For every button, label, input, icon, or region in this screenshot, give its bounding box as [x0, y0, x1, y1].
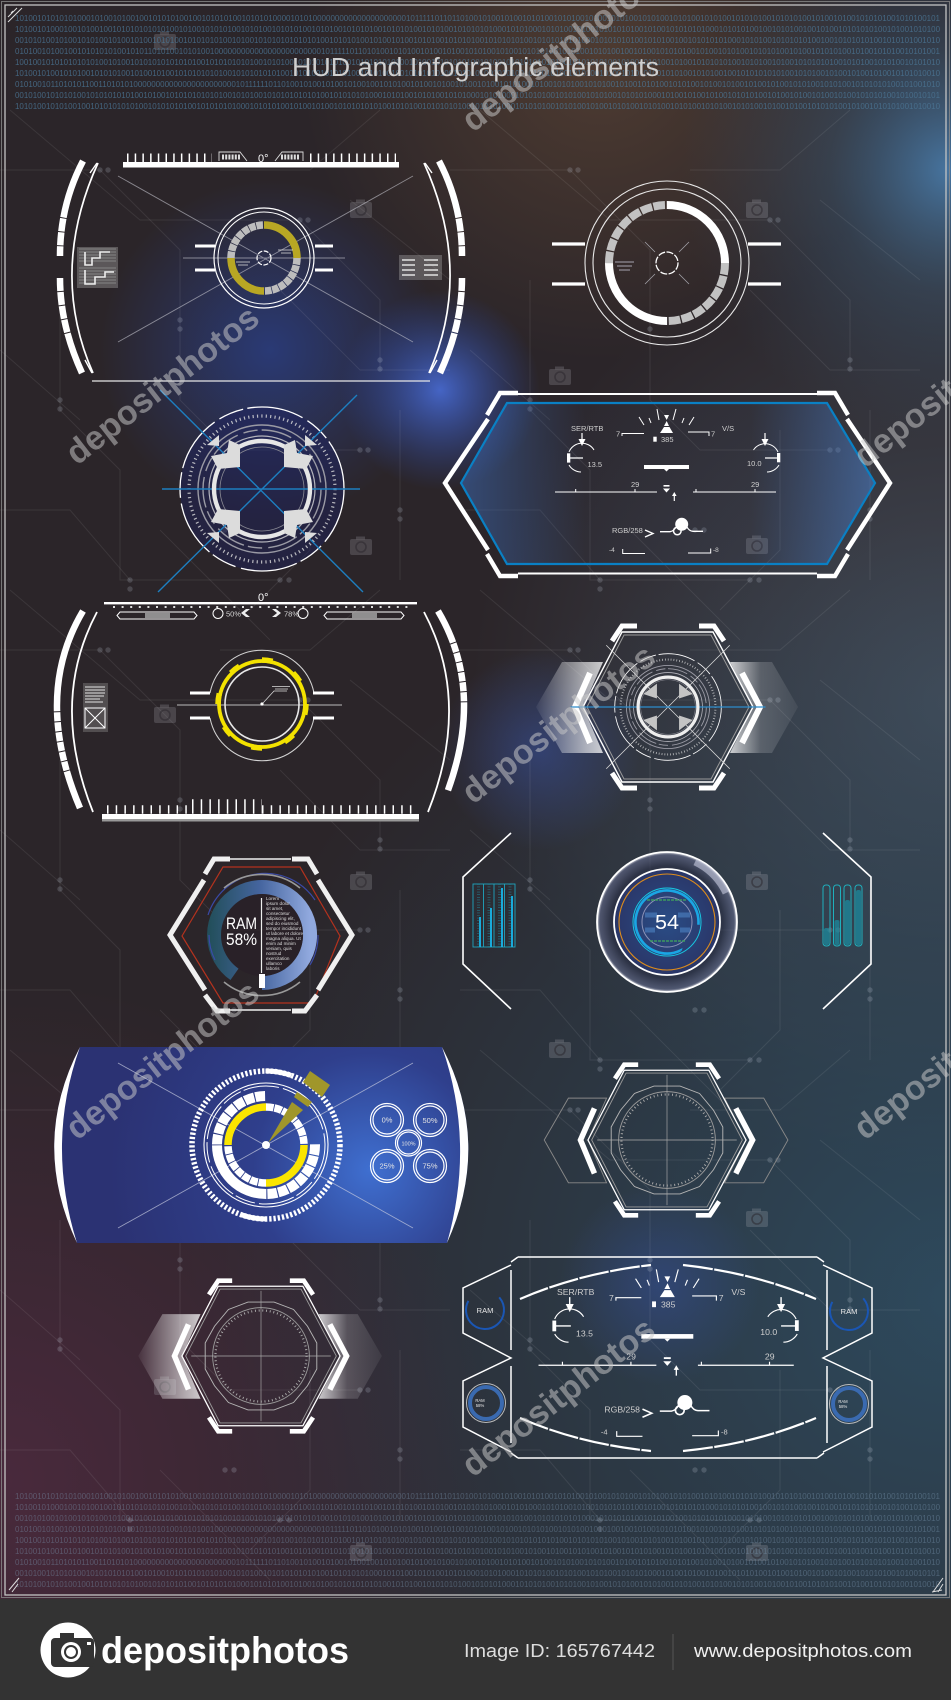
lorem text: sed do eiusmod — [266, 921, 299, 926]
curved rails — [520, 1265, 816, 1451]
panel: blue crosshair circle — [158, 390, 363, 592]
corner arrows — [207, 435, 317, 543]
binary text: bottom block: 00101010010100101010010100101001010100101010101001010010101010101010100101010100101001010010101001010101001010101010010101010101000101010101001010100100101010101000101010010101010100100101010101001010101001010 — [15, 1514, 941, 1523]
instrument cluster: 29 — [751, 480, 759, 489]
frame — [463, 1257, 872, 1458]
instrument cluster: 385 — [661, 435, 674, 444]
baseline — [92, 380, 430, 382]
binary text: bottom block: 10100101001010100101010100101001010010101010101001010101010100101010010101010010101001001010101010010101010010101001010010100101010010100101010100101010010101001001010101010100101010010100101001010010101010010 — [15, 1547, 941, 1556]
instrument cluster: V/S — [722, 424, 734, 433]
binary text: top block: 10010010101010101010010100101010101010101001010101010100101010010101010101001010101010100101001010101010010100101010101010100101010101001010010101001010010101010100101010010100101010101001010100101010010101010 — [15, 58, 941, 67]
binary text: top block: 01010010110101011001101010100000000000000000000000101111110110100101001010010100100101010010100101001010010100101010010100101010010101001010010101001010100101001010010100101001010100101010010101010100101001010 — [15, 80, 941, 89]
zero heading: 0° — [258, 592, 269, 604]
binary text: top block: 10100101001010100101010100101001010010101010101001010101010100101010010101010010101001001010101010010101010010101001010010100101010010100101010100101010010101001001010101010100101010010100101001010010101010010 — [15, 69, 941, 78]
blue crosshair lines — [158, 390, 363, 592]
lorem text — [266, 896, 303, 971]
instrument cluster: 7 — [711, 430, 715, 438]
binary text: top block: 10101001010100100101010101010010101010100101010101000101010100101001010010101010101001010100101010101001010101000101010100101010010100101010010101001010100101010010101001010010100101010100101001010101001010010 — [15, 102, 941, 111]
title: HUD and Infographic elements — [292, 54, 659, 82]
side labels: 58% — [839, 1404, 847, 1409]
instrument cluster: 29 — [626, 1351, 636, 1361]
readouts: 78% — [284, 610, 299, 618]
binary text: bottom block: 10010010101010101010010100101010101010101001010101010100101010010101010101001010101010100101001010101010010100101010101010100101010101001010010101001010010101010100101010010100101010101001010100101010010101010 — [15, 1536, 941, 1545]
instrument cluster: -8 — [721, 1428, 728, 1437]
percent buttons: 25% — [379, 1162, 395, 1170]
instrument cluster: 29 — [765, 1351, 775, 1361]
percent buttons: 75% — [422, 1162, 438, 1170]
binary text: bottom block: 01010010100100101010101001010110101001010100100000000000000000000000010111110110101001010100101001010010101001010010101010010101001010100100101001010101001010010101001010101001010010101010010100101010010101001 — [15, 1525, 941, 1534]
crescents — [54, 1047, 468, 1243]
readouts: 50% — [226, 610, 241, 618]
RAM label — [226, 915, 257, 949]
watermarks: depositphotos — [455, 1310, 662, 1484]
RAM label: RAM — [226, 915, 257, 933]
binary text: top block: 10100101000100101001001010101010101001010010101010010101001010101001010100101010100101010100101010010101010100010101000101010010100101010101001010010101010100010101010010010101001001010010101010100101001010100 — [15, 25, 941, 34]
lorem text: exercitation — [266, 956, 290, 961]
binary text: bottom block — [15, 1492, 941, 1589]
panel: cockpit display — [458, 1257, 876, 1458]
binary text: bottom block: 10101001010100100101010101010010101010100101010101000101010100101001010010101010101001010100101010101001010101000101010100101010010100101010010101001010100101010010101001010010100101010100101001010101001010010 — [15, 1580, 941, 1589]
binary text: bottom block: 10100101010101000101001010010010101010010010101010010101010000101010000000000000000000001011111011011010010100101001010100101010010100101010010101001010100101010010101010010101010010100101001010101001010100101 — [15, 1492, 941, 1501]
side labels: RAM — [838, 1399, 848, 1404]
lorem text: ut labore et dolore — [266, 931, 303, 936]
bottom scale — [102, 806, 419, 822]
instrument cluster: -4 — [601, 1428, 608, 1437]
binary text: top block: 00101010010100101010010100101001010100101010101001010010101010101010100101010100101001010010101001010101001010101010010101010101000101010101001010100100101010101000101010010101010100100101010101001010101001010 — [15, 36, 941, 45]
side labels — [475, 1306, 857, 1409]
instrument cluster — [539, 1269, 799, 1437]
watermarks: depositphotos — [59, 973, 266, 1147]
crosshair lines — [118, 176, 413, 342]
instrument cluster: 385 — [661, 1300, 676, 1310]
instrument cluster: 13.5 — [576, 1328, 593, 1338]
lorem text: sit amet, — [266, 906, 283, 911]
lorem text: laboris — [266, 966, 280, 971]
data box — [83, 683, 108, 732]
instrument cluster: -8 — [713, 547, 719, 554]
instrument cluster: 7 — [719, 1293, 724, 1303]
instrument cluster — [555, 409, 780, 554]
panel: winged hexagon — [138, 1281, 382, 1431]
watermarks: depositphotos — [455, 637, 662, 811]
main dial — [192, 1071, 340, 1219]
lorem text: ullamco — [266, 961, 282, 966]
icons: faint camera marks — [154, 32, 768, 1561]
radial gauge yellow — [195, 208, 333, 308]
panel: bubble speed gauge: 54 — [655, 912, 679, 934]
lorem text: consectetur — [266, 911, 290, 916]
panel: blue hexagon flight instruments — [445, 393, 890, 576]
instrument cluster: -4 — [609, 547, 615, 554]
donut RAM — [208, 873, 318, 996]
instrument cluster: SER/RTB — [557, 1287, 595, 1297]
top rail — [104, 602, 417, 619]
side labels: RAM — [475, 1398, 485, 1403]
yellow ring gauge — [177, 650, 342, 761]
data box right — [399, 255, 442, 280]
website: www.depositphotos.com — [693, 1640, 912, 1661]
panel: outline hexagon — [544, 1065, 788, 1215]
binary text: bottom block: 01010010110101011001101010100000000000000000000000101111110110100101001010010100100101010010100101001010010100101010010100101010010101001010010101001010100101001010010100101001010100101010010101010100101001010 — [15, 1558, 941, 1567]
panel: blue console gauge — [54, 1047, 468, 1243]
panel: RAM hexagon — [170, 859, 352, 1011]
lorem text: veniam, quis — [266, 946, 292, 951]
percent buttons: 100% — [401, 1142, 416, 1148]
panel: hexagon radar with wings — [536, 626, 798, 788]
instrument cluster: 10.0 — [747, 459, 762, 468]
binary text: top block: 00101001010101001010101010100101001010101010101001010100101010101010100101010101000101010010101001010100010101000101010100101010010101001010101000101001010010100101010100101001010010100101001010101001010010101 — [15, 91, 941, 100]
panel: ring gauge top-right — [552, 181, 781, 345]
heading zero degrees: 0° — [258, 153, 269, 165]
readouts — [213, 608, 308, 618]
footer bar — [0, 1599, 951, 1700]
bubble dial — [597, 852, 737, 992]
instrument cluster: SER/RTB — [571, 424, 603, 433]
instrument cluster: V/S — [731, 1287, 746, 1297]
icon: camera logo — [40, 1622, 96, 1678]
RAM label: 58% — [226, 931, 257, 949]
left arcs — [60, 161, 98, 373]
instrument cluster: 7 — [609, 1293, 614, 1303]
side labels: RAM — [841, 1307, 857, 1316]
instrument cluster: 29 — [631, 480, 639, 489]
side arcs — [57, 611, 97, 812]
binary text: top block — [15, 14, 941, 111]
panel: HUD frame with yellow ring — [57, 592, 464, 822]
instrument cluster: 13.5 — [588, 460, 602, 469]
percent buttons — [370, 1104, 446, 1182]
panel: bubble speed gauge — [463, 833, 871, 1009]
side labels: 58% — [476, 1403, 484, 1408]
percent buttons: 0% — [382, 1116, 393, 1124]
top scale bar — [123, 158, 399, 168]
left bars — [473, 884, 515, 947]
instrument cluster: RGB/258 — [604, 1405, 640, 1415]
panel: HUD targeting frame top-left — [60, 152, 462, 381]
lorem text: tempor incididunt — [266, 926, 302, 931]
lorem text: enim ad minim — [266, 941, 296, 946]
logo wordmark: depositphotos — [101, 1630, 349, 1671]
right arcs — [424, 161, 462, 373]
image id: Image ID: 165767442 — [464, 1640, 655, 1661]
lorem text: ipsum dolor — [266, 901, 290, 906]
binary text: top block: 01010010100100101010101001010110101001010100100000000000000000000000010111110110101001010100101001010010101001010010101010010101001010100100101001010101001010010101001010101001010010101010010100101010010101001 — [15, 47, 941, 56]
instrument cluster: RGB/258 — [612, 526, 643, 535]
chevron tabs — [219, 152, 303, 161]
watermarks: depositphotos — [59, 298, 266, 472]
right bars — [823, 885, 862, 946]
instrument cluster: 7 — [616, 430, 620, 438]
lorem text: nostrud — [266, 951, 282, 956]
percent buttons: 50% — [422, 1116, 438, 1125]
lorem text: Lorem — [266, 896, 279, 901]
binary text: bottom block: 00101001010101001010101010100101001010101010101001010100101010101010100101010101000101010010101001010100010101000101010100101010010101001010101000101001010010100101010100101001010010100101001010101001010010101 — [15, 1569, 941, 1578]
data box left — [77, 247, 118, 288]
side RAM rings — [458, 1283, 876, 1424]
binary text: bottom block: 10100101000100101001001010101010101001010010101010010101001010101001010100101010100101010100101010010101010100010101000101010010100101010101001010010101010100010101010010010101001001010010101010100101001010100 — [15, 1503, 941, 1512]
side labels: RAM — [477, 1306, 493, 1315]
binary text: top block: 10100101010101000101001010010010101010010010101010010101010000101010000000000000000000001011111011011010010100101001010100101010010100101010010101001010100101010010101010010101010010100101001010101001010100101 — [15, 14, 941, 23]
lorem text: adipiscing elit, — [266, 916, 295, 921]
lorem text: magna aliqua. Ut — [266, 936, 301, 941]
instrument cluster: 10.0 — [760, 1327, 777, 1337]
